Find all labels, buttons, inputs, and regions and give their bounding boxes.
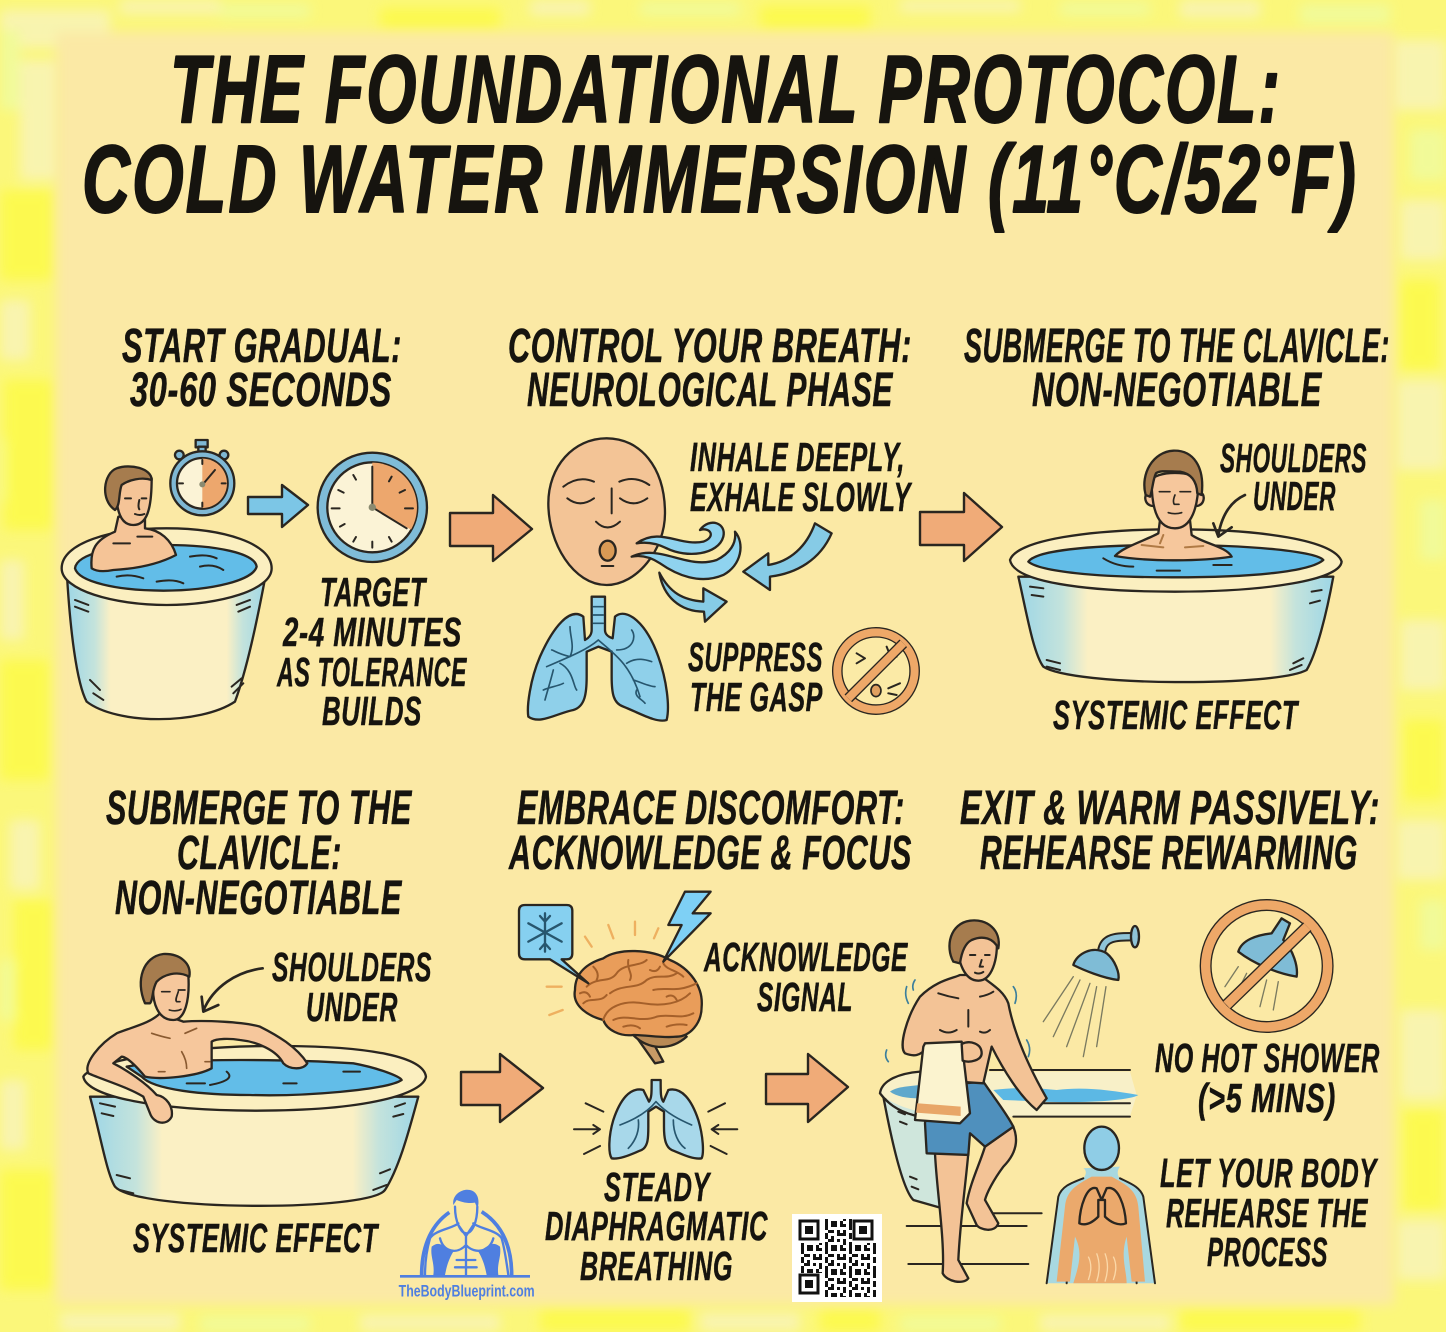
heading: submerge to the clavicle: SUBMERGE TO THE [106,782,413,835]
icon: man in round tub [62,466,272,719]
icon: man leaving tub with towel [880,920,1138,1282]
icon: lungs with inward arrows [574,1080,737,1159]
label: systemic effect: SYSTEMIC EFFECT [133,1215,379,1261]
heading: embrace discomfort: EMBRACE DISCOMFORT: [517,782,905,835]
label: target minutes: 2-4 MINUTES [282,609,462,655]
panel: embrace discomfort [508,782,912,1289]
icon: no gasp sign [837,632,915,710]
logo: the body blueprint [399,1190,535,1301]
label: let your body rehearse: PROCESS [1207,1229,1328,1275]
arrow: orange step 4 to 5 [461,1054,543,1122]
heading: control your breath: CONTROL YOUR BREATH: [508,320,912,373]
heading: submerge to the clavicle [106,782,413,925]
label: target minutes [276,569,467,734]
heading: start gradual: START GRADUAL: [122,320,402,373]
arrow: orange step 2 to 3 [920,493,1002,561]
label: shoulders under [272,944,432,1030]
label: target minutes: BUILDS [322,688,422,734]
label: no hot shower [1155,1035,1380,1121]
logo: the body blueprint: TheBodyBlueprint.com [399,1282,535,1301]
icon: brain with cold and lightning signals [519,892,711,1063]
label: shoulders under: UNDER [306,984,398,1030]
icon: clock [318,453,427,562]
label: shoulders under: SHOULDERS [272,944,432,990]
heading: control your breath: NEUROLOGICAL PHASE [527,364,894,417]
label: target minutes: AS TOLERANCE [276,649,467,695]
label: suppress the gasp: THE GASP [690,674,823,720]
icon: stopwatch [170,440,234,515]
arrow: orange step 1 to 2 [450,495,532,561]
label: inhale exhale [690,434,913,520]
icon: man in wide tub [1010,451,1342,682]
icon: body warming [1047,1127,1155,1283]
icon: shower [1043,926,1139,1057]
label: acknowledge signal [703,934,908,1020]
heading: start gradual [122,320,402,417]
heading: exit and warm [960,782,1380,880]
arrow: blue to clock [248,485,308,527]
panel: exit and warm passively [880,782,1380,1283]
arrow: orange step 5 to 6 [766,1054,848,1122]
label: systemic effect: SYSTEMIC EFFECT [1053,692,1299,738]
title [82,36,1358,233]
label: shoulders under [1220,435,1367,519]
label: steady diaphragmatic breathing: STEADY [604,1164,712,1210]
heading: embrace discomfort [508,782,912,880]
icon: lungs [528,597,668,721]
label: suppress the gasp [688,634,823,720]
heading: submerge to the clavicle [964,320,1390,417]
icon: no hot shower sign [1206,905,1328,1027]
heading: start gradual: 30-60 SECONDS [130,364,392,417]
icon: breath waves and arrows [632,523,832,622]
arrow: shoulders pointer [1213,495,1245,537]
panel: start gradual [62,320,467,734]
label: suppress the gasp: SUPPRESS [688,634,823,680]
label: inhale exhale: EXHALE SLOWLY [690,474,913,520]
QR code [792,1214,882,1302]
label: shoulders under: UNDER [1253,473,1336,519]
panel: control your breath [508,320,915,721]
label: let your body rehearse [1160,1150,1379,1275]
icon: face exhaling [548,438,665,585]
heading: submerge to the clavicle: NON-NEGOTIABLE [115,872,403,925]
arrow: shoulders pointer [202,968,263,1012]
icon: man relaxing in tub [83,954,426,1206]
panel: submerge top [964,320,1390,738]
label: acknowledge signal: ACKNOWLEDGE [703,934,908,980]
label: acknowledge signal: SIGNAL [757,974,853,1020]
label: steady diaphragmatic breathing: BREATHING [580,1243,733,1289]
label: inhale exhale: INHALE DEEPLY, [690,434,905,480]
label: steady diaphragmatic breathing [545,1164,768,1289]
heading: submerge to the clavicle: CLAVICLE: [177,827,342,880]
label: steady diaphragmatic breathing: DIAPHRAGMATIC [545,1203,768,1249]
heading: control your breath [508,320,912,417]
label: target minutes: TARGET [320,569,427,615]
label: no hot shower: (>5 MINS) [1198,1075,1336,1121]
panel: submerge bottom [83,782,432,1261]
heading: embrace discomfort: ACKNOWLEDGE & FOCUS [508,827,912,880]
